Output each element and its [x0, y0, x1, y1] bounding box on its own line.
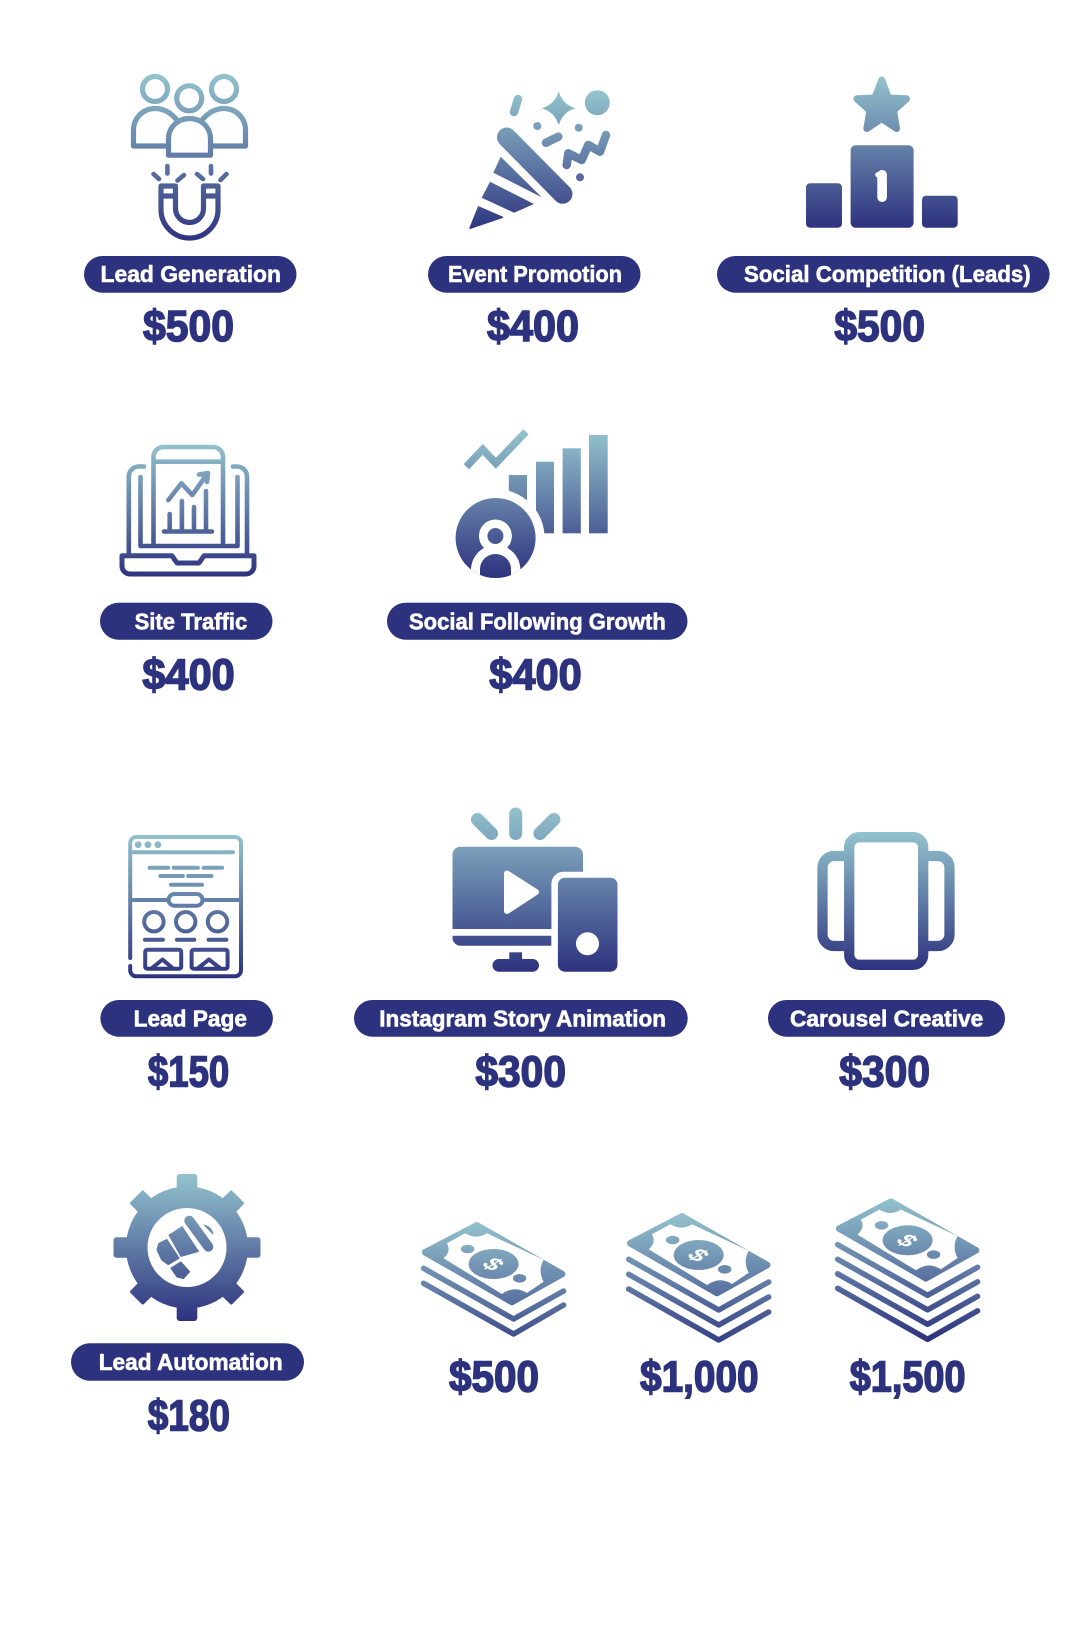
label pill: Instagram Story Animation [379, 1006, 666, 1032]
price: $400 [489, 652, 582, 700]
price: $150 [148, 1048, 229, 1096]
icon: stack of bills: $ [475, 1254, 511, 1275]
icon: video on monitor and phone [452, 814, 631, 982]
icon: landing page wireframe [130, 837, 241, 976]
label pill: Lead Page [134, 1006, 247, 1032]
panel: Site Traffic [100, 447, 272, 700]
label pill: Social Following Growth [409, 608, 666, 634]
price: $500 [449, 1354, 539, 1402]
icon: stack of bills [424, 1225, 564, 1334]
icon: people and magnet [134, 76, 246, 238]
price: $400 [487, 303, 579, 351]
label pill [100, 1000, 273, 1037]
icon: gear with megaphone [114, 1174, 260, 1321]
icon: stack of bills [629, 1216, 769, 1340]
icon: laptop and phone with chart [122, 447, 254, 574]
label pill: Social Competition (Leads) [744, 261, 1031, 287]
label pill [354, 1000, 688, 1037]
icon: stack of bills [838, 1202, 978, 1339]
price: $1,000 [640, 1354, 759, 1402]
label pill: Lead Automation [99, 1349, 283, 1375]
panel: Instagram Story Animation [354, 814, 688, 1096]
panel: Lead Generation [84, 76, 296, 351]
panel: Social Following Growth [387, 432, 688, 700]
icon: stack of bills: $ [680, 1245, 716, 1266]
label pill: Carousel Creative [790, 1006, 983, 1032]
panel: Lead Automation [71, 1174, 304, 1440]
panel: Lead Page [100, 837, 273, 1096]
label pill [84, 256, 296, 293]
panel: $500 money stack [424, 1225, 564, 1402]
panel: Carousel Creative [768, 837, 1005, 1096]
icon: stack of bills: $ [889, 1231, 925, 1251]
label pill [100, 603, 272, 640]
price: $500 [143, 303, 234, 351]
label pill [71, 1343, 304, 1381]
panel: $1,500 money stack [838, 1202, 978, 1402]
price: $300 [475, 1048, 566, 1096]
label pill [717, 256, 1050, 293]
label pill [768, 1000, 1005, 1037]
label pill: Site Traffic [135, 608, 247, 634]
price: $500 [834, 303, 925, 351]
icon: carousel cards [822, 837, 950, 965]
price: $400 [142, 652, 235, 700]
price: $180 [148, 1392, 230, 1440]
icon: podium with star [806, 80, 958, 228]
price: $1,500 [850, 1354, 966, 1402]
label pill: Event Promotion [448, 261, 622, 287]
icon: growth bars with user [447, 432, 608, 587]
label pill [428, 256, 640, 293]
icon: party popper [470, 90, 610, 228]
panel: Event Promotion [428, 90, 640, 351]
label pill: Lead Generation [100, 261, 281, 287]
panel: $1,000 money stack [629, 1216, 769, 1402]
label pill [387, 603, 688, 640]
price: $300 [839, 1048, 930, 1096]
panel: Social Competition (Leads) [717, 80, 1050, 351]
